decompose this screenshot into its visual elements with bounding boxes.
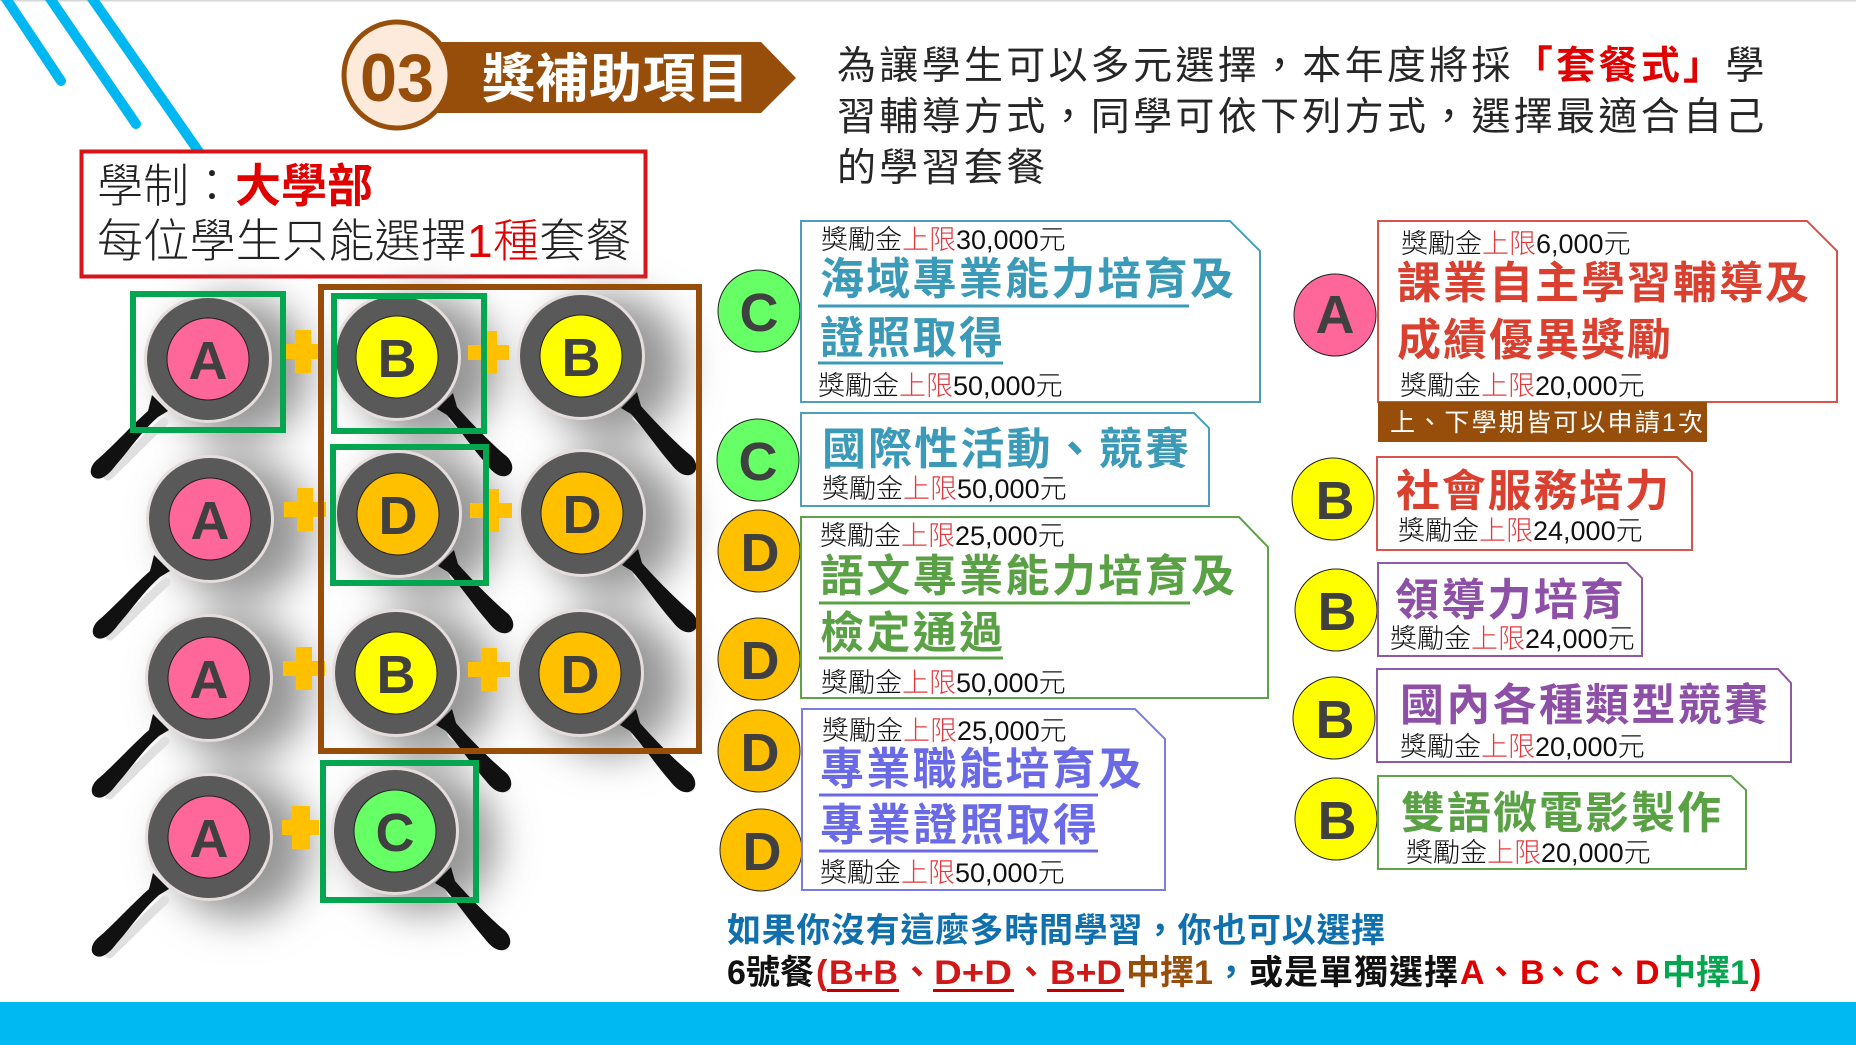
panel: leadership: 領導力培育 <box>1395 576 1624 625</box>
badge D 4 <box>720 809 802 891</box>
footnote line 2: B+B <box>829 954 898 992</box>
badge C 1: C <box>740 283 778 343</box>
panel: marine professional training: 獎勵金上限50,000元 <box>818 371 1063 401</box>
panel: bilingual film <box>1378 776 1746 869</box>
green frame A <box>133 294 283 430</box>
panel: self-directed learning: 獎勵金上限6,000元 <box>1401 229 1631 259</box>
section heading: 03 <box>360 40 434 116</box>
badge B 3: B <box>1316 690 1354 750</box>
pan B row 1: B <box>378 329 416 389</box>
panel: community service: 社會服務培力 <box>1396 467 1669 516</box>
panel: language training: 檢定通過 <box>820 609 1003 658</box>
panel: marine professional training: 獎勵金上限30,000元 <box>821 225 1066 255</box>
panel: community service: 獎勵金上限24,000元 <box>1398 516 1643 546</box>
plus signs <box>282 330 512 849</box>
pan D row 3: D <box>560 645 600 705</box>
callout: school system rule: 學制：大學部 <box>97 160 373 212</box>
badge D 3 <box>718 710 800 792</box>
badge B 2: B <box>1318 582 1356 642</box>
note: apply each semester <box>1378 402 1707 442</box>
footnote line 2: C <box>1575 954 1600 992</box>
pan A row 4 <box>92 773 273 957</box>
intro paragraph <box>837 45 1768 190</box>
panel: bilingual film: 獎勵金上限20,000元 <box>1406 838 1651 868</box>
panel: self-directed learning: 課業自主學習輔導及 <box>1397 259 1809 308</box>
pan D row 2 second: D <box>562 485 602 545</box>
footnote line 2: ( <box>816 954 828 992</box>
section heading: 獎補助項目 <box>482 50 749 109</box>
section heading <box>344 22 796 128</box>
brown combo frame <box>321 287 699 751</box>
pan menu grid <box>91 292 697 957</box>
badge C 1 <box>718 270 800 352</box>
footnote line 2: 、 <box>1541 954 1575 992</box>
badge B 1 <box>1292 458 1374 540</box>
panel: marine professional training: 海域專業能力培育及 <box>820 255 1234 304</box>
panel: professional skills: 專業證照取得 <box>820 801 1097 850</box>
panel: international activities <box>801 413 1209 506</box>
badge A: A <box>1316 285 1354 345</box>
panel: marine professional training <box>801 221 1260 402</box>
badge D 1 <box>718 510 800 592</box>
footnote line 2: 中擇1 <box>1126 954 1213 992</box>
green frame B <box>334 296 484 431</box>
panel: domestic competitions <box>1377 669 1791 762</box>
pan D row 2 second <box>518 449 697 632</box>
panel: language training: 獎勵金上限50,000元 <box>821 668 1066 698</box>
panel: bilingual film: 雙語微電影製作 <box>1401 789 1721 838</box>
badge D 1: D <box>740 523 780 583</box>
panel: professional skills: 專業職能培育及 <box>820 745 1142 794</box>
bottom bar <box>0 1002 1856 1045</box>
panel: self-directed learning <box>1378 221 1837 402</box>
pan D row 3 <box>516 609 695 792</box>
panel: self-directed learning: 獎勵金上限20,000元 <box>1400 371 1645 401</box>
footnote line 2: D+D <box>934 954 1012 992</box>
callout: school system rule: 每位學生只能選擇1種套餐 <box>97 215 632 267</box>
badge D 3: D <box>740 723 780 783</box>
badge B 2 <box>1295 569 1377 651</box>
pan B row 1 second: B <box>562 328 600 388</box>
panel: leadership <box>1378 563 1642 656</box>
callout: school system rule <box>82 152 646 276</box>
badge D 4: D <box>742 822 782 882</box>
intro paragraph: 為讓學生可以多元選擇，本年度將採「套餐式」學 <box>837 45 1768 88</box>
badge C 2: C <box>738 432 778 492</box>
footnote line 2: 或是單獨選擇 <box>1249 954 1458 992</box>
badge C 2 <box>717 419 799 501</box>
panel: professional skills: 獎勵金上限50,000元 <box>820 858 1065 888</box>
pan B row 3: B <box>376 645 416 705</box>
footnote line 2: ) <box>1750 954 1761 992</box>
panel: language training <box>801 517 1268 698</box>
pan A row 4: A <box>190 809 228 869</box>
intro paragraph: 的學習套餐 <box>837 147 1049 190</box>
panel: domestic competitions: 獎勵金上限20,000元 <box>1400 732 1645 762</box>
intro paragraph: 習輔導方式，同學可依下列方式，選擇最適合自己 <box>837 96 1768 139</box>
pan B row 1 <box>333 293 512 476</box>
pan C row 4: C <box>376 803 414 863</box>
panel: leadership: 獎勵金上限24,000元 <box>1390 624 1635 654</box>
pan D row 2 <box>334 450 513 633</box>
footnote line 2: B+D <box>1050 954 1122 992</box>
pan A row 1 <box>91 295 272 479</box>
footnote line 2: 、 <box>1014 954 1048 992</box>
pan A row 1: A <box>188 331 228 391</box>
panel: language training: 語文專業能力培育及 <box>820 552 1235 601</box>
footnote line 2: 6號餐 <box>727 954 814 992</box>
panel: international activities: 獎勵金上限50,000元 <box>822 474 1067 504</box>
green frame C <box>323 763 476 900</box>
footnote line 2 <box>727 954 1761 992</box>
footnote line 2: 、 <box>1600 954 1634 992</box>
pan A row 3: A <box>190 650 228 710</box>
pan A row 2 <box>93 455 274 639</box>
pan B row 3 <box>332 609 511 792</box>
pan D row 2: D <box>378 486 418 546</box>
panel: professional skills: 獎勵金上限25,000元 <box>822 716 1067 746</box>
badge D 2 <box>718 618 800 700</box>
panel: self-directed learning: 成績優異獎勵 <box>1397 316 1671 365</box>
pan A row 2: A <box>190 491 230 551</box>
panel: marine professional training: 證照取得 <box>820 314 1003 363</box>
panel: domestic competitions: 國內各種類型競賽 <box>1400 681 1768 730</box>
pan shadows <box>166 294 684 919</box>
footnote line 2: ， <box>1214 954 1248 992</box>
green frame D <box>333 447 486 583</box>
pan A row 3 <box>92 614 273 798</box>
decorative diagonal lines <box>3 0 199 152</box>
badge A <box>1294 274 1376 356</box>
footnote line 2: B <box>1520 954 1545 992</box>
pan C row 4 <box>331 767 510 950</box>
badge B 1: B <box>1316 471 1354 531</box>
footnote line 2: D <box>1635 954 1660 992</box>
footnote line 1: 如果你沒有這麼多時間學習，你也可以選擇 <box>727 912 1385 950</box>
badge B 3 <box>1293 677 1375 759</box>
badge D 2: D <box>740 631 780 691</box>
footnote line 2: 、 <box>1484 954 1518 992</box>
badge B 4: B <box>1318 791 1356 851</box>
panel: language training: 獎勵金上限25,000元 <box>820 521 1065 551</box>
footnote line 2: 、 <box>900 954 934 992</box>
footnote line 2: 中擇1 <box>1662 954 1749 992</box>
badge B 4 <box>1295 778 1377 860</box>
footnote line 2: A <box>1460 954 1485 992</box>
panel: professional skills <box>802 709 1165 890</box>
panel: international activities: 國際性活動、競賽 <box>822 425 1189 474</box>
pan B row 1 second <box>517 292 696 475</box>
panel: community service <box>1377 457 1692 550</box>
note: apply each semester: 上、下學期皆可以申請1次 <box>1390 409 1703 437</box>
